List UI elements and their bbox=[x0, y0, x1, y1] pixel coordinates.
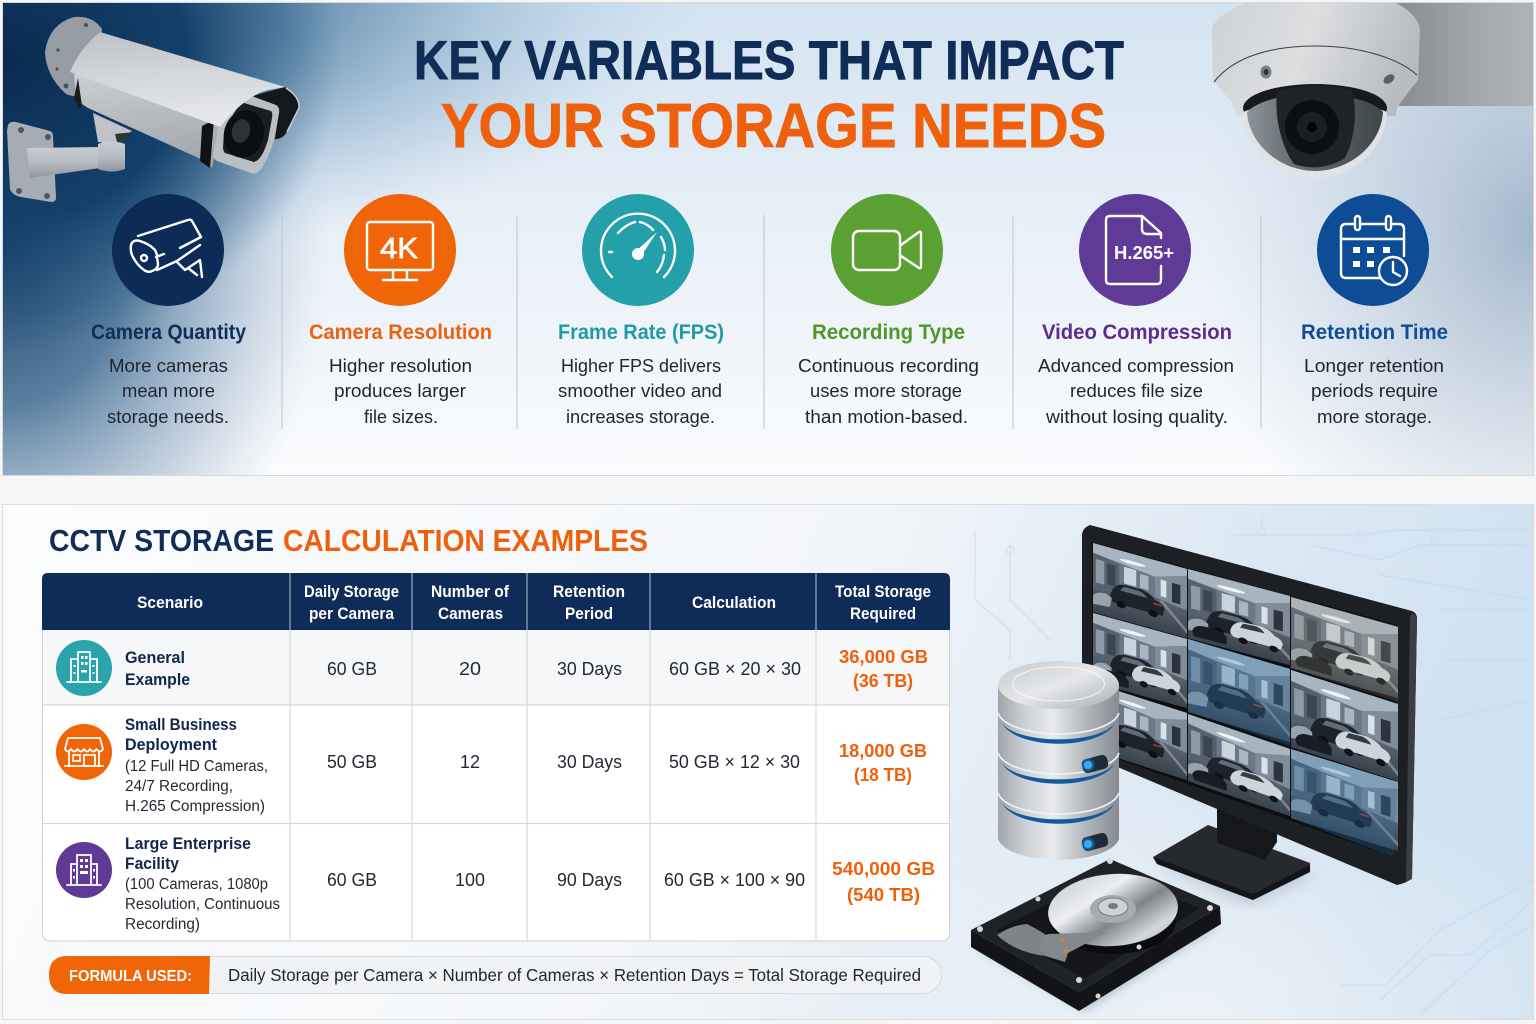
icon: speedometer gauge bbox=[582, 194, 694, 306]
description: camera quantity bbox=[107, 355, 229, 427]
row: small business deployment: Deployment bbox=[125, 736, 217, 754]
feature: recording type bbox=[798, 194, 979, 427]
icon: 4K monitor: 4K bbox=[380, 233, 419, 265]
feature: camera resolution bbox=[309, 194, 492, 427]
title bbox=[414, 29, 1124, 161]
description: camera quantity: storage needs. bbox=[107, 406, 229, 427]
feature: retention time bbox=[1301, 194, 1448, 427]
row: small business deployment: (18 TB) bbox=[854, 764, 912, 785]
row: small business deployment: 24/7 Recording, bbox=[125, 778, 233, 795]
feature: camera resolution: Camera Resolution bbox=[309, 321, 492, 344]
formula bar bbox=[49, 956, 942, 994]
illustration: monitor with CCTV feeds bbox=[1082, 525, 1417, 904]
table header bbox=[137, 583, 931, 623]
row: large enterprise facility: 60 GB bbox=[327, 869, 377, 890]
video feed grid bbox=[1093, 543, 1398, 857]
illustration: bullet CCTV camera bbox=[7, 17, 299, 202]
description: recording type bbox=[798, 355, 979, 427]
feature: camera quantity: Camera Quantity bbox=[91, 321, 246, 344]
row: general example: (36 TB) bbox=[853, 670, 913, 691]
status lights bbox=[1081, 754, 1109, 852]
row: general example: 20 bbox=[459, 658, 481, 679]
heading: calculation examples: CCTV STORAGE bbox=[49, 523, 274, 558]
row: general example: 60 GB × 20 × 30 bbox=[669, 658, 801, 679]
description: recording type: Continuous recording bbox=[798, 355, 979, 376]
icon: cctv camera bbox=[112, 194, 224, 306]
icon: H.265+ file bbox=[1079, 194, 1191, 306]
feature: retention time: Retention Time bbox=[1301, 321, 1448, 344]
table: storage examples bbox=[42, 573, 950, 941]
table header: Number of bbox=[431, 583, 509, 601]
table header: Total Storage bbox=[835, 583, 931, 601]
illustration: storage database cylinders bbox=[998, 661, 1119, 860]
title: KEY VARIABLES THAT IMPACT bbox=[414, 29, 1124, 91]
row: large enterprise facility: Large Enterprise bbox=[125, 835, 251, 853]
description: camera quantity: mean more bbox=[122, 380, 215, 401]
feature: frame rate: Frame Rate (FPS) bbox=[558, 321, 724, 344]
panel: key variables bbox=[2, 2, 1534, 476]
row: general example: 60 GB bbox=[327, 658, 377, 679]
row: small business deployment bbox=[56, 716, 927, 815]
table header: Daily Storage bbox=[304, 583, 399, 601]
description: video compression: without losing quality. bbox=[1045, 406, 1228, 427]
feature: recording type: Recording Type bbox=[812, 321, 965, 344]
formula bar: FORMULA USED: bbox=[69, 968, 192, 985]
icon: 4K monitor bbox=[344, 194, 456, 306]
row: large enterprise facility: 90 Days bbox=[557, 869, 622, 890]
table header: Calculation bbox=[692, 594, 776, 612]
description: recording type: uses more storage bbox=[810, 380, 962, 401]
icon: H.265+ file: H.265+ bbox=[1114, 242, 1174, 263]
description: camera resolution: file sizes. bbox=[364, 406, 438, 427]
illustration: dome CCTV camera bbox=[1212, 3, 1533, 179]
row: general example: 30 Days bbox=[557, 658, 622, 679]
row: large enterprise facility: Recording) bbox=[125, 916, 200, 933]
row: general example: General bbox=[125, 649, 185, 667]
row: small business deployment: 50 GB × 12 × 30 bbox=[669, 751, 800, 772]
row: general example bbox=[56, 640, 928, 696]
feature: video compression bbox=[1038, 194, 1234, 427]
table header: per Camera bbox=[309, 605, 395, 623]
row: general example: 36,000 GB bbox=[839, 646, 928, 667]
row: large enterprise facility: 60 GB × 100 × 90 bbox=[664, 869, 805, 890]
description: retention time: more storage. bbox=[1317, 406, 1432, 427]
monitor stand bbox=[1153, 800, 1310, 900]
feature: video compression: Video Compression bbox=[1042, 321, 1232, 344]
illustration: open hard disk drive bbox=[971, 858, 1222, 1012]
row: large enterprise facility: Resolution, Continuous bbox=[125, 896, 280, 913]
description: recording type: than motion-based. bbox=[805, 406, 968, 427]
icon: calendar with clock bbox=[1317, 194, 1429, 306]
row: large enterprise facility: 100 bbox=[455, 869, 485, 890]
description: camera resolution: produces larger bbox=[334, 380, 466, 401]
description: camera quantity: More cameras bbox=[109, 355, 228, 376]
row: small business deployment: 18,000 GB bbox=[839, 740, 927, 761]
table header: Required bbox=[850, 605, 916, 623]
panel: calculation examples bbox=[2, 504, 1534, 1020]
table header: Cameras bbox=[438, 605, 503, 623]
description: frame rate: increases storage. bbox=[566, 406, 715, 427]
row: small business deployment: 30 Days bbox=[557, 751, 622, 772]
description: frame rate bbox=[558, 355, 722, 427]
row: small business deployment: 50 GB bbox=[327, 751, 377, 772]
row: large enterprise facility: (100 Cameras, 1080p bbox=[125, 876, 268, 893]
row: small business deployment: H.265 Compression) bbox=[125, 798, 265, 815]
row: general example: Example bbox=[125, 671, 190, 689]
icon: storefront bbox=[56, 724, 112, 780]
description: video compression bbox=[1038, 355, 1234, 427]
table header: Scenario bbox=[137, 594, 203, 612]
formula bar: Daily Storage per Camera × Number of Cameras × Retention Days = Total Storage Required bbox=[228, 965, 921, 985]
row: large enterprise facility bbox=[56, 835, 935, 933]
icon: enterprise building bbox=[56, 842, 112, 898]
description: retention time bbox=[1304, 355, 1444, 427]
feature: frame rate bbox=[558, 194, 724, 427]
description: camera resolution bbox=[329, 355, 472, 427]
row: small business deployment: 12 bbox=[460, 751, 480, 772]
description: frame rate: smoother video and bbox=[558, 380, 722, 401]
icon: video camera bbox=[831, 194, 943, 306]
row: large enterprise facility: (540 TB) bbox=[847, 884, 920, 905]
description: frame rate: Higher FPS delivers bbox=[561, 355, 721, 376]
table header: Retention bbox=[553, 583, 625, 601]
row: small business deployment: (12 Full HD Cameras, bbox=[125, 758, 268, 775]
row: large enterprise facility: Facility bbox=[125, 855, 180, 873]
row: large enterprise facility: 540,000 GB bbox=[832, 858, 935, 879]
title: YOUR STORAGE NEEDS bbox=[441, 92, 1106, 161]
description: camera resolution: Higher resolution bbox=[329, 355, 472, 376]
table header: Period bbox=[565, 605, 613, 623]
row: small business deployment: Small Business bbox=[125, 716, 237, 734]
heading: calculation examples: CALCULATION EXAMPLES bbox=[283, 523, 648, 558]
description: video compression: reduces file size bbox=[1070, 380, 1203, 401]
description: retention time: periods require bbox=[1311, 380, 1438, 401]
heading: calculation examples bbox=[49, 523, 648, 558]
icon: office building bbox=[56, 640, 112, 696]
description: video compression: Advanced compression bbox=[1038, 355, 1234, 376]
description: retention time: Longer retention bbox=[1304, 355, 1444, 376]
feature: camera quantity bbox=[91, 194, 246, 427]
